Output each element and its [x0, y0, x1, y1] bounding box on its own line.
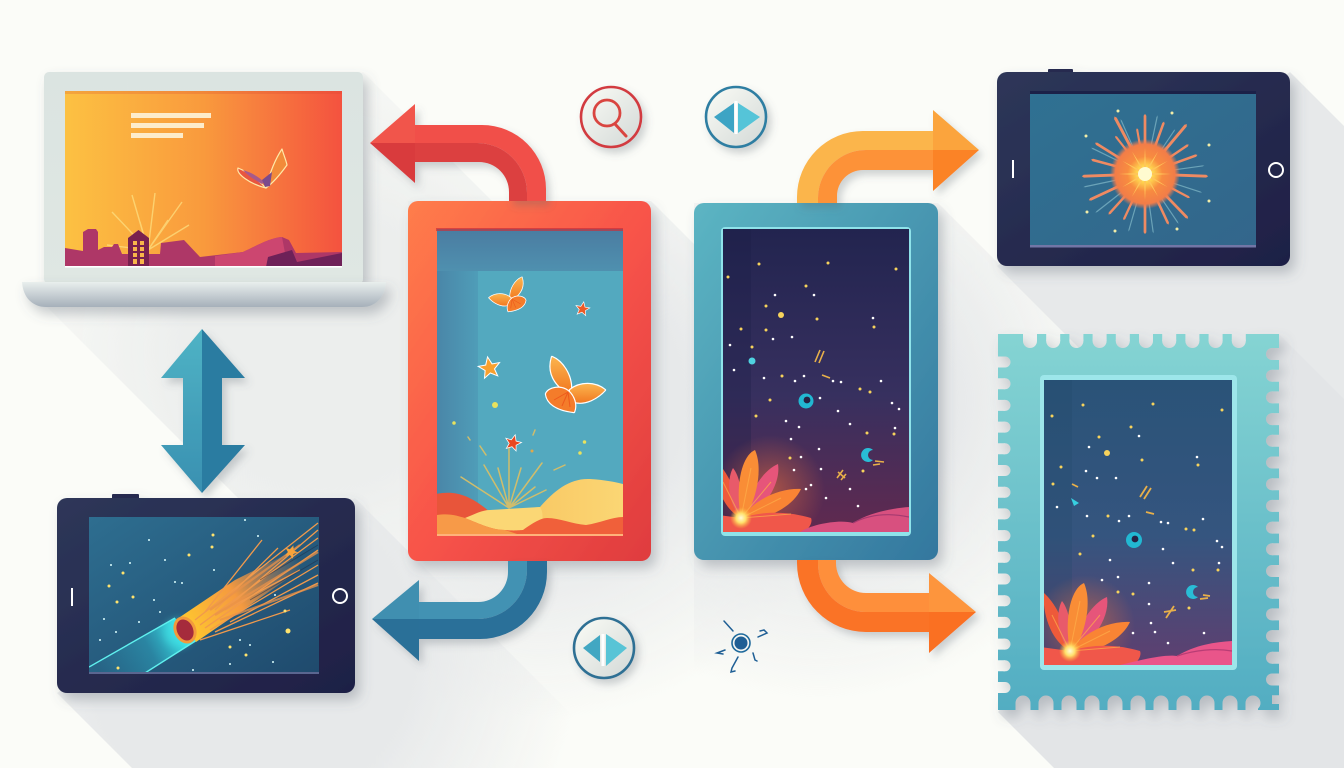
- icon: laptop bird: [238, 149, 287, 188]
- arrow: orange to stamp: [797, 560, 976, 653]
- stamp frame: [998, 334, 1279, 710]
- red frame body: [408, 201, 651, 561]
- stamp bright lip: [1040, 375, 1237, 670]
- sparkle dots: [1086, 111, 1209, 231]
- icon: small orange star: [285, 546, 298, 559]
- icon: teal diamond badge top: [706, 87, 766, 147]
- comet head: [173, 616, 196, 644]
- icon: cyan eye: [1126, 532, 1142, 548]
- teal frame body: [694, 203, 938, 560]
- icon: stars: [478, 302, 590, 451]
- icon: small butterfly: [489, 277, 526, 311]
- tablet body: [997, 69, 1290, 266]
- icon: cyan eye: [798, 394, 814, 408]
- laptop screen sunset scene: [65, 91, 342, 267]
- tablet screen: [1030, 91, 1256, 247]
- teal tablet frame: [694, 203, 938, 560]
- teal frame bright lip: [721, 227, 911, 536]
- red tablet frame: [408, 201, 651, 561]
- laptop frame: [44, 72, 363, 284]
- icon: spark target: [717, 621, 767, 672]
- icon: teal diamond badge bottom: [574, 618, 634, 678]
- arrow: red to laptop: [370, 104, 546, 201]
- icon: cyan dot: [748, 358, 756, 364]
- icon: large butterfly: [546, 357, 605, 412]
- teal frame night scene: [711, 229, 909, 545]
- arrow: vertical double arrow: [161, 329, 245, 493]
- arrow: blue to left tablet: [372, 561, 547, 661]
- icon: magnifier badge: [581, 87, 641, 147]
- icon: cyan crescent: [1186, 585, 1198, 599]
- laptop base: [22, 282, 386, 307]
- flower: [723, 450, 812, 532]
- stamp perforated body: [998, 334, 1279, 710]
- laptop: [22, 72, 386, 307]
- sunburst: [1082, 114, 1208, 234]
- tablet body: [57, 494, 355, 693]
- left tablet with comet: [57, 494, 355, 693]
- tablet screen comet scene: [89, 517, 319, 673]
- flower: [1040, 583, 1141, 667]
- icon: cyan crescent: [861, 448, 873, 462]
- icon: cyan wedge: [1071, 498, 1079, 506]
- red frame screen scene: [436, 229, 623, 535]
- stamp night scene: [1035, 380, 1232, 675]
- right tablet with sunburst: [997, 69, 1290, 266]
- arrow: orange to right tablet: [797, 110, 979, 203]
